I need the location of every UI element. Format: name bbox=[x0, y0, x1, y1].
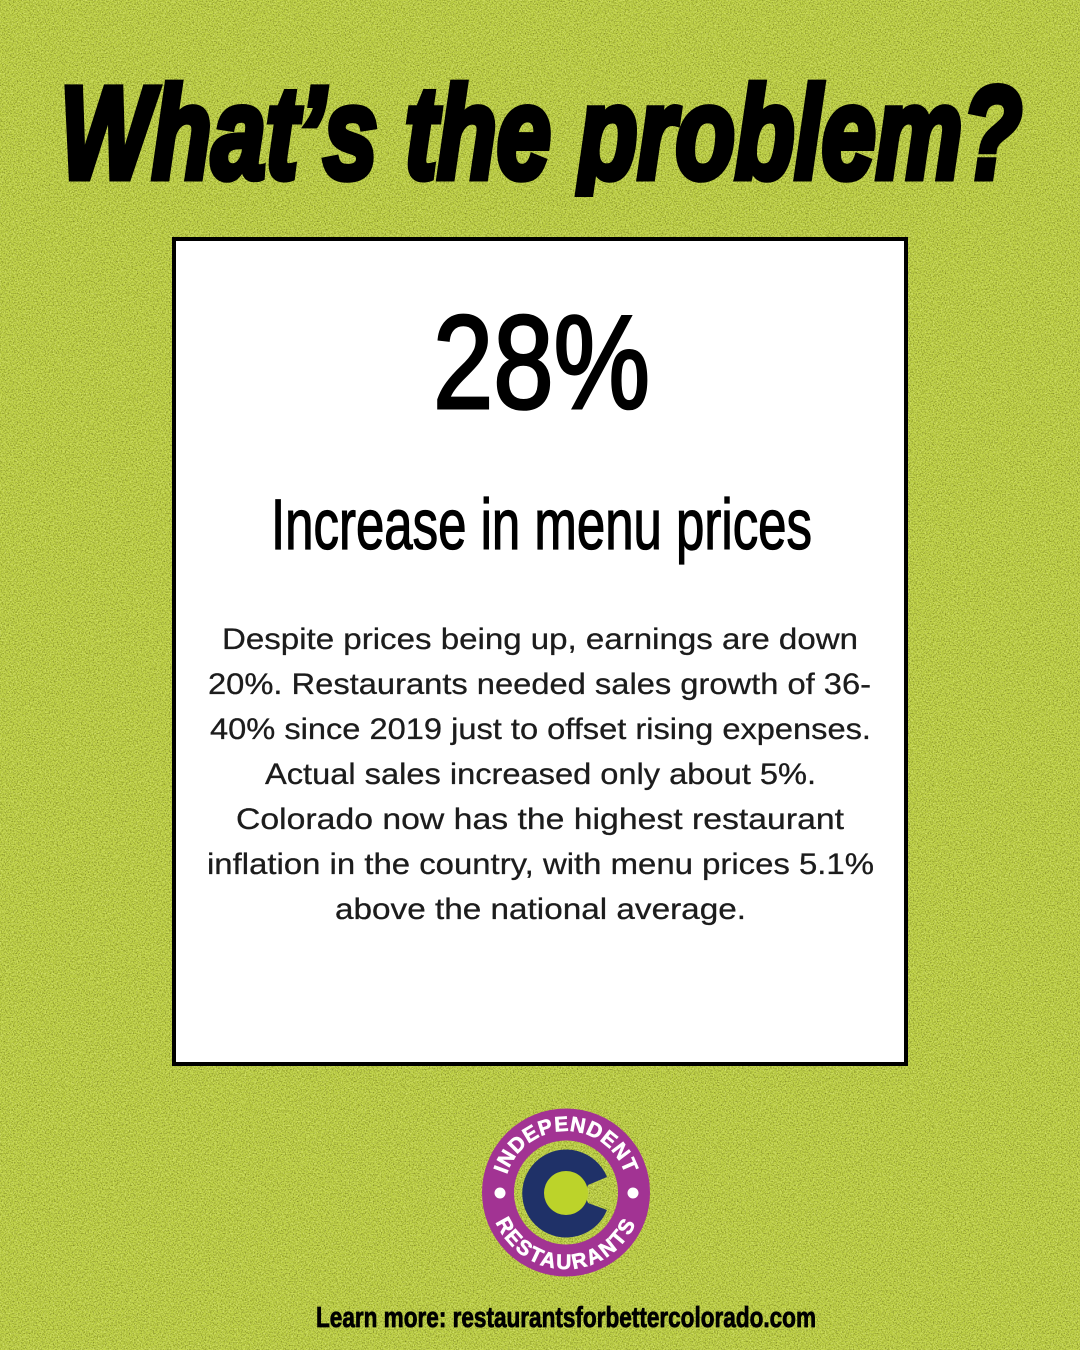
body text: 20%. Restaurants needed sales growth of 36- bbox=[208, 668, 871, 701]
body text: above the national average. bbox=[335, 893, 746, 926]
badge ring bbox=[498, 1124, 634, 1260]
badge text: independent: INDEPENDENT bbox=[493, 1116, 639, 1174]
logo: independent restaurants badge bbox=[482, 1108, 650, 1276]
badge stars bbox=[494, 1188, 638, 1198]
panel: statistic card bbox=[174, 239, 906, 1064]
card background bbox=[174, 239, 906, 1064]
body text: Despite prices being up, earnings are down bbox=[222, 623, 858, 656]
colorado C mark bbox=[522, 1150, 607, 1238]
body text: Actual sales increased only about 5%. bbox=[265, 758, 816, 791]
body text: Colorado now has the highest restaurant bbox=[236, 803, 845, 836]
C centre disc bbox=[544, 1171, 588, 1215]
body text: 40% since 2019 just to offset rising expenses. bbox=[210, 713, 871, 746]
heading: increase in menu prices: Increase in menu prices bbox=[271, 486, 812, 565]
badge text: restaurants: RESTAURANTS bbox=[496, 1216, 634, 1270]
footer link text: Learn more: restaurantsforbettercolorado.com bbox=[316, 1302, 816, 1334]
body text: inflation in the country, with menu prices 5.1% bbox=[207, 848, 874, 881]
body text bbox=[207, 623, 874, 926]
statistic: 28%: 28% bbox=[433, 289, 650, 437]
